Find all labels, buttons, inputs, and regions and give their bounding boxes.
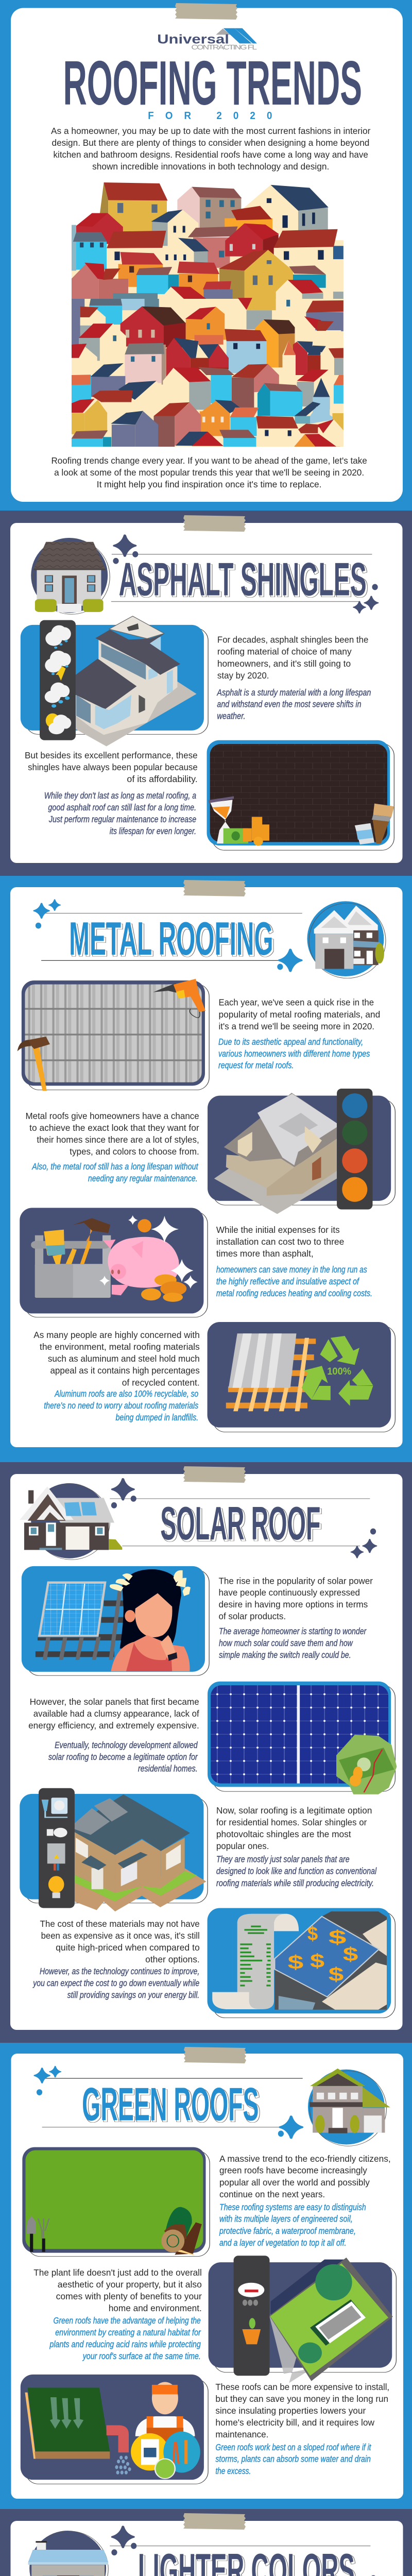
intro card xyxy=(11,8,403,502)
panel: weatherproof building xyxy=(21,616,208,747)
text: solar history: However, the solar panels that first became xyxy=(30,1697,199,1707)
text: metal styles: to achieve the exact look that they want for xyxy=(29,1123,199,1133)
text: metal styles: their homes since there are a lot of styles, xyxy=(37,1135,199,1145)
lighter background xyxy=(0,2509,412,2576)
text: green cost xyxy=(215,2382,389,2476)
panel: insulation, worker and savings xyxy=(21,2375,208,2484)
panel: solar roof bill: $ xyxy=(307,1923,318,1944)
text: metal styles: needing any regular maintenance. xyxy=(88,1173,198,1183)
text: solar shingles: popular ones. xyxy=(216,1841,269,1851)
text: metal cost xyxy=(216,1225,372,1298)
text: metal popularity xyxy=(218,998,380,1071)
tape xyxy=(183,515,246,532)
text: metal recycled: As many people are highly concerned with xyxy=(33,1330,200,1340)
text: metal recycled: Aluminum roofs are also 100% recyclable, so xyxy=(54,1388,198,1399)
panel: solar panel and thinking woman xyxy=(22,1566,209,1675)
intro text: shown incredible innovations in both technology and design. xyxy=(92,162,329,172)
text: metal cost: times more than asphalt, xyxy=(216,1249,314,1259)
metal card xyxy=(10,887,403,1447)
text: green trend xyxy=(219,2154,391,2248)
section: intro xyxy=(0,0,412,511)
text: green benefits: The plant life doesn't just add to the overall xyxy=(33,2268,202,2278)
metal background xyxy=(0,876,412,1462)
panel: solar cells with money xyxy=(208,1682,397,1794)
text: green benefits: aesthetic of your property, but it also xyxy=(58,2280,202,2290)
panel: grass with gardening tools xyxy=(22,2147,210,2257)
text: asphalt affordability: shingles have always been popular because xyxy=(28,762,198,772)
text: asphalt affordability: good asphalt roof can still last for a long time. xyxy=(48,802,196,812)
icon: metal roof house xyxy=(307,901,386,978)
subtitle: FOR 2020 xyxy=(148,110,272,122)
text: solar interest xyxy=(218,1576,373,1660)
green background xyxy=(0,2043,412,2509)
heading: solar roof xyxy=(110,1479,376,1558)
text: solar cost: However, as the technology continues to improve, xyxy=(40,1966,199,1976)
text: asphalt intro: homeowners, and it's still going to xyxy=(217,659,351,669)
text: metal styles: Also, the metal roof still has a long lifespan without xyxy=(31,1161,198,1172)
heading: green roofs xyxy=(35,2066,303,2138)
text: metal recycled: such as aluminum and steel hold much xyxy=(48,1354,200,1364)
text: green benefits: environment by creating a natural habitat for xyxy=(55,2327,201,2337)
tape xyxy=(175,3,237,20)
text: green benefits: plants and reducing acid rains while protecting xyxy=(49,2339,201,2349)
asphalt card xyxy=(10,523,403,863)
icon: asphalt house xyxy=(31,538,110,614)
text: metal recycled xyxy=(33,1330,200,1422)
text: green benefits: home and environment. xyxy=(109,2303,202,2313)
panel: metal sheet with tools xyxy=(18,979,209,1091)
text: asphalt affordability: of its affordability. xyxy=(127,774,198,784)
text: metal cost: installation can cost two to three xyxy=(216,1237,344,1247)
logo xyxy=(157,28,257,52)
text: solar cost: The cost of these materials may not have xyxy=(40,1919,200,1929)
text: metal recycled: there's no need to worry about roofing materials xyxy=(44,1400,198,1411)
text: asphalt affordability: Just perform regular maintenance to increase xyxy=(48,814,196,824)
panel: toolbox and piggy bank xyxy=(20,1208,208,1317)
text: green cost: the excess. xyxy=(215,2466,251,2476)
text: asphalt intro: roofing material of choice of many xyxy=(217,647,352,657)
text: asphalt affordability: While they don't last as long as metal roofing, a xyxy=(44,790,196,801)
text: green benefits xyxy=(33,2268,202,2361)
heading: lighter colors xyxy=(110,2527,376,2576)
intro background xyxy=(0,0,412,511)
text: solar cost xyxy=(32,1919,200,2000)
tape xyxy=(183,1466,246,1483)
text: metal recycled: appeal as it contains high percentages xyxy=(50,1366,200,1376)
lighter card xyxy=(10,2521,403,2576)
text: solar cost: been as expensive as it once was, it's still xyxy=(41,1931,200,1941)
panel: metal roof house with colour swatches xyxy=(208,1089,395,1214)
logo: Universal xyxy=(157,32,229,47)
panel: solar roof bill xyxy=(208,1908,395,2018)
panel: corrugated sheet and recycle symbol xyxy=(208,1322,395,1432)
heading: metal roofing xyxy=(34,900,302,971)
heading: asphalt shingles xyxy=(111,535,378,613)
tape xyxy=(183,2513,246,2530)
panel: shingle texture with cost icons xyxy=(207,740,394,850)
text: solar history: solar roofing to become a legitimate option for xyxy=(48,1752,198,1762)
tape xyxy=(184,2047,246,2063)
solar background xyxy=(0,1462,412,2043)
text: metal cost: While the initial expenses for its xyxy=(216,1225,340,1235)
panel: solar roof bill: $ xyxy=(343,1944,358,1965)
closing intro text xyxy=(51,456,367,489)
panel: solar roof bill: $ xyxy=(329,1927,347,1948)
text: metal styles: types, and colors to choose from. xyxy=(70,1147,199,1157)
text: solar history: Eventually, technology development allowed xyxy=(55,1740,198,1750)
text: metal popularity: request for metal roofs. xyxy=(218,1060,294,1071)
text: solar cost: still providing savings on your energy bill. xyxy=(67,1990,199,2000)
text: green benefits: your roof's surface at the same time. xyxy=(82,2351,201,2361)
panel: corrugated sheet and recycle symbol: 100% xyxy=(327,1365,351,1377)
asphalt background xyxy=(0,511,412,876)
section: asphalt shingles xyxy=(0,511,412,876)
text: green trend: continue on the next years. xyxy=(219,2190,325,2199)
text: asphalt affordability xyxy=(25,751,198,836)
text: asphalt affordability: But besides its excellent performance, these xyxy=(25,751,198,760)
text: solar cost: you can expect the cost to go down eventually while xyxy=(32,1978,199,1988)
text: green benefits: comes with plenty of benefits to your xyxy=(56,2292,202,2301)
text: solar interest: of solar products. xyxy=(218,1612,286,1621)
panel: solar shingle house with electric icons xyxy=(20,1788,208,1911)
tape xyxy=(183,880,246,896)
green card xyxy=(11,2054,403,2499)
icon: green roof house xyxy=(308,2069,390,2146)
text: green cost: maintenance. xyxy=(215,2430,268,2439)
logo: CONTRACTING FL xyxy=(191,44,257,52)
text: metal recycled: the environment, metal roofing materials xyxy=(40,1342,200,1352)
text: asphalt intro: stay by 2020. xyxy=(217,671,269,681)
text: metal recycled: being dumped in landfills. xyxy=(115,1412,198,1422)
text: solar cost: other options. xyxy=(145,1955,200,1964)
text: solar shingles: photovoltaic shingles are the most xyxy=(216,1829,351,1839)
text: solar history: energy efficiency, and extremely expensive. xyxy=(28,1721,199,1731)
panel: rooftop garden xyxy=(209,2256,396,2383)
section: metal roofing xyxy=(0,876,412,1462)
text: asphalt affordability: its lifespan for even longer. xyxy=(110,826,196,836)
text: solar history: available had a clumsy appearance, lack of xyxy=(33,1709,199,1719)
text: solar shingles xyxy=(216,1806,377,1888)
panel: solar roof bill: $ xyxy=(310,1951,324,1972)
text: solar history xyxy=(28,1697,199,1774)
section: solar roof xyxy=(0,1462,412,2043)
text: asphalt intro: weather. xyxy=(217,711,246,721)
panel: solar roof bill: $ xyxy=(288,1952,304,1973)
text: asphalt intro xyxy=(216,635,371,721)
text: metal recycled: of recycled content. xyxy=(122,1378,200,1387)
icon: light roof house xyxy=(24,2531,113,2576)
section: lighter colors xyxy=(0,2509,412,2576)
closing intro text: It might help you find inspiration once it's time to replace. xyxy=(97,480,321,489)
text: metal styles: Metal roofs give homeowners have a chance xyxy=(25,1111,199,1121)
text: solar history: residential homes. xyxy=(138,1764,198,1774)
text: solar cost: quite high-priced when compared to xyxy=(56,1943,200,1953)
intro text xyxy=(51,126,370,172)
text: green benefits: Green roofs have the advantage of helping the xyxy=(54,2315,201,2326)
text: metal styles xyxy=(25,1111,199,1183)
solar card xyxy=(10,1474,403,2030)
text: solar interest: have people continuously expressed xyxy=(218,1588,360,1598)
panel: solar roof bill: $ xyxy=(329,1964,344,1985)
icon: solar house xyxy=(20,1483,122,1560)
illustration: colourful houses xyxy=(72,182,344,448)
section: green roofs xyxy=(0,2043,412,2509)
